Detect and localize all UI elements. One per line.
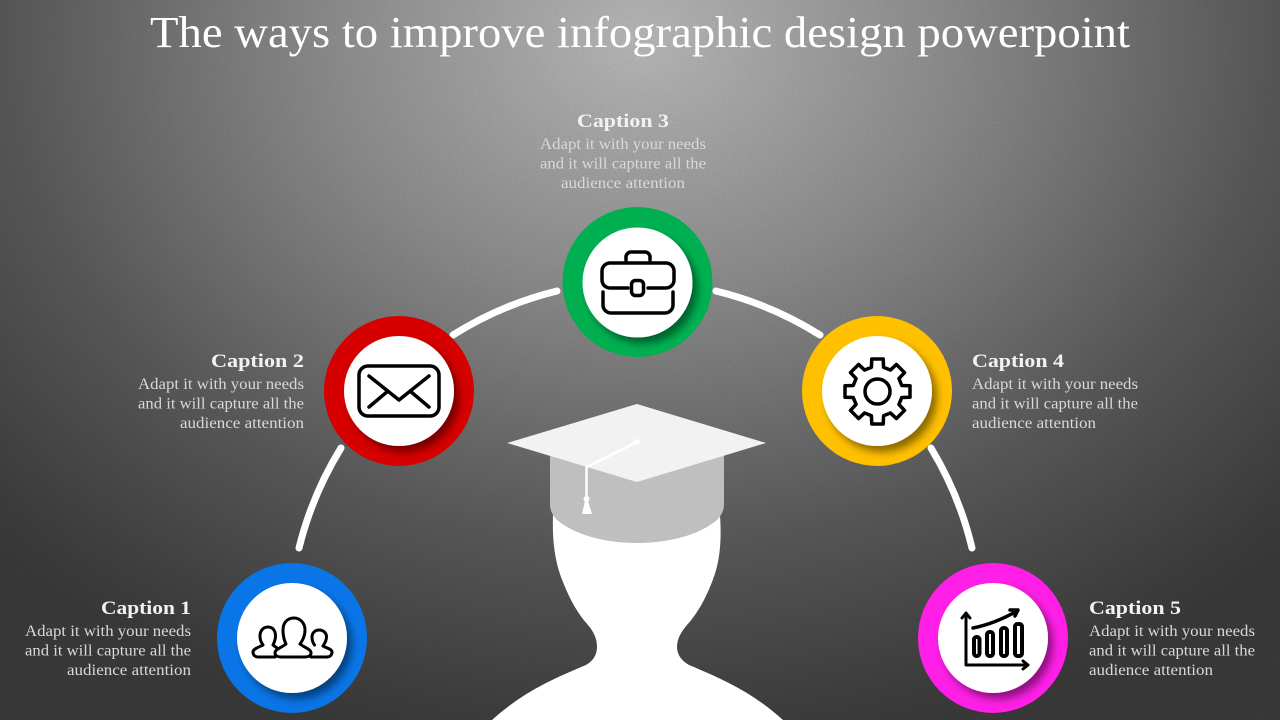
disc xyxy=(237,583,347,693)
caption 4: Caption 4 xyxy=(972,351,1065,372)
caption 1 xyxy=(25,598,191,679)
caption 3: Adapt it with your needs xyxy=(540,136,706,153)
icon: people xyxy=(253,618,332,657)
ring xyxy=(918,563,1068,713)
caption 2: and it will capture all the xyxy=(138,396,304,412)
cap band xyxy=(550,450,724,543)
icon: gear xyxy=(845,359,910,424)
disc xyxy=(822,336,932,446)
caption 1: Caption 1 xyxy=(101,598,191,619)
caption 4: Adapt it with your needs xyxy=(972,376,1138,393)
caption 2 xyxy=(138,351,304,432)
node 5: growth chart xyxy=(918,563,1068,713)
caption 4 xyxy=(972,351,1138,432)
caption 2: Adapt it with your needs xyxy=(138,376,304,393)
connecting arcs xyxy=(299,291,972,548)
graduate figure xyxy=(492,404,783,720)
caption 5: Adapt it with your needs xyxy=(1089,623,1255,640)
node 3: briefcase xyxy=(562,207,712,357)
caption 2: audience attention xyxy=(180,415,304,432)
caption 5 xyxy=(1089,598,1255,679)
caption 3 xyxy=(540,111,706,192)
caption 4: audience attention xyxy=(972,415,1096,432)
node 2: mail xyxy=(324,316,474,466)
icon: chart xyxy=(962,610,1028,669)
caption 4: and it will capture all the xyxy=(972,396,1138,412)
caption 1: Adapt it with your needs xyxy=(25,623,191,640)
ring xyxy=(802,316,952,466)
caption 5: Caption 5 xyxy=(1089,598,1181,619)
node 1: people xyxy=(217,563,367,713)
disc xyxy=(582,228,692,338)
caption 2: Caption 2 xyxy=(211,351,304,372)
ring xyxy=(324,316,474,466)
tassel xyxy=(582,439,640,514)
caption 5: audience attention xyxy=(1089,662,1213,679)
node 4: settings xyxy=(802,316,952,466)
caption 1: and it will capture all the xyxy=(25,642,191,660)
caption 3: Caption 3 xyxy=(577,111,669,132)
caption 5: and it will capture all the xyxy=(1089,642,1255,660)
caption 3: audience attention xyxy=(561,175,685,192)
caption 1: audience attention xyxy=(67,662,191,679)
mortarboard xyxy=(507,404,766,482)
title: The ways to improve infographic design powerpoint xyxy=(150,8,1130,57)
icon: briefcase xyxy=(602,252,674,313)
person silhouette xyxy=(492,515,783,720)
ring xyxy=(217,563,367,713)
caption 3: and it will capture all the xyxy=(540,156,706,172)
disc xyxy=(344,336,454,446)
ring xyxy=(562,207,712,357)
icon: envelope xyxy=(359,366,439,416)
disc xyxy=(938,583,1048,693)
